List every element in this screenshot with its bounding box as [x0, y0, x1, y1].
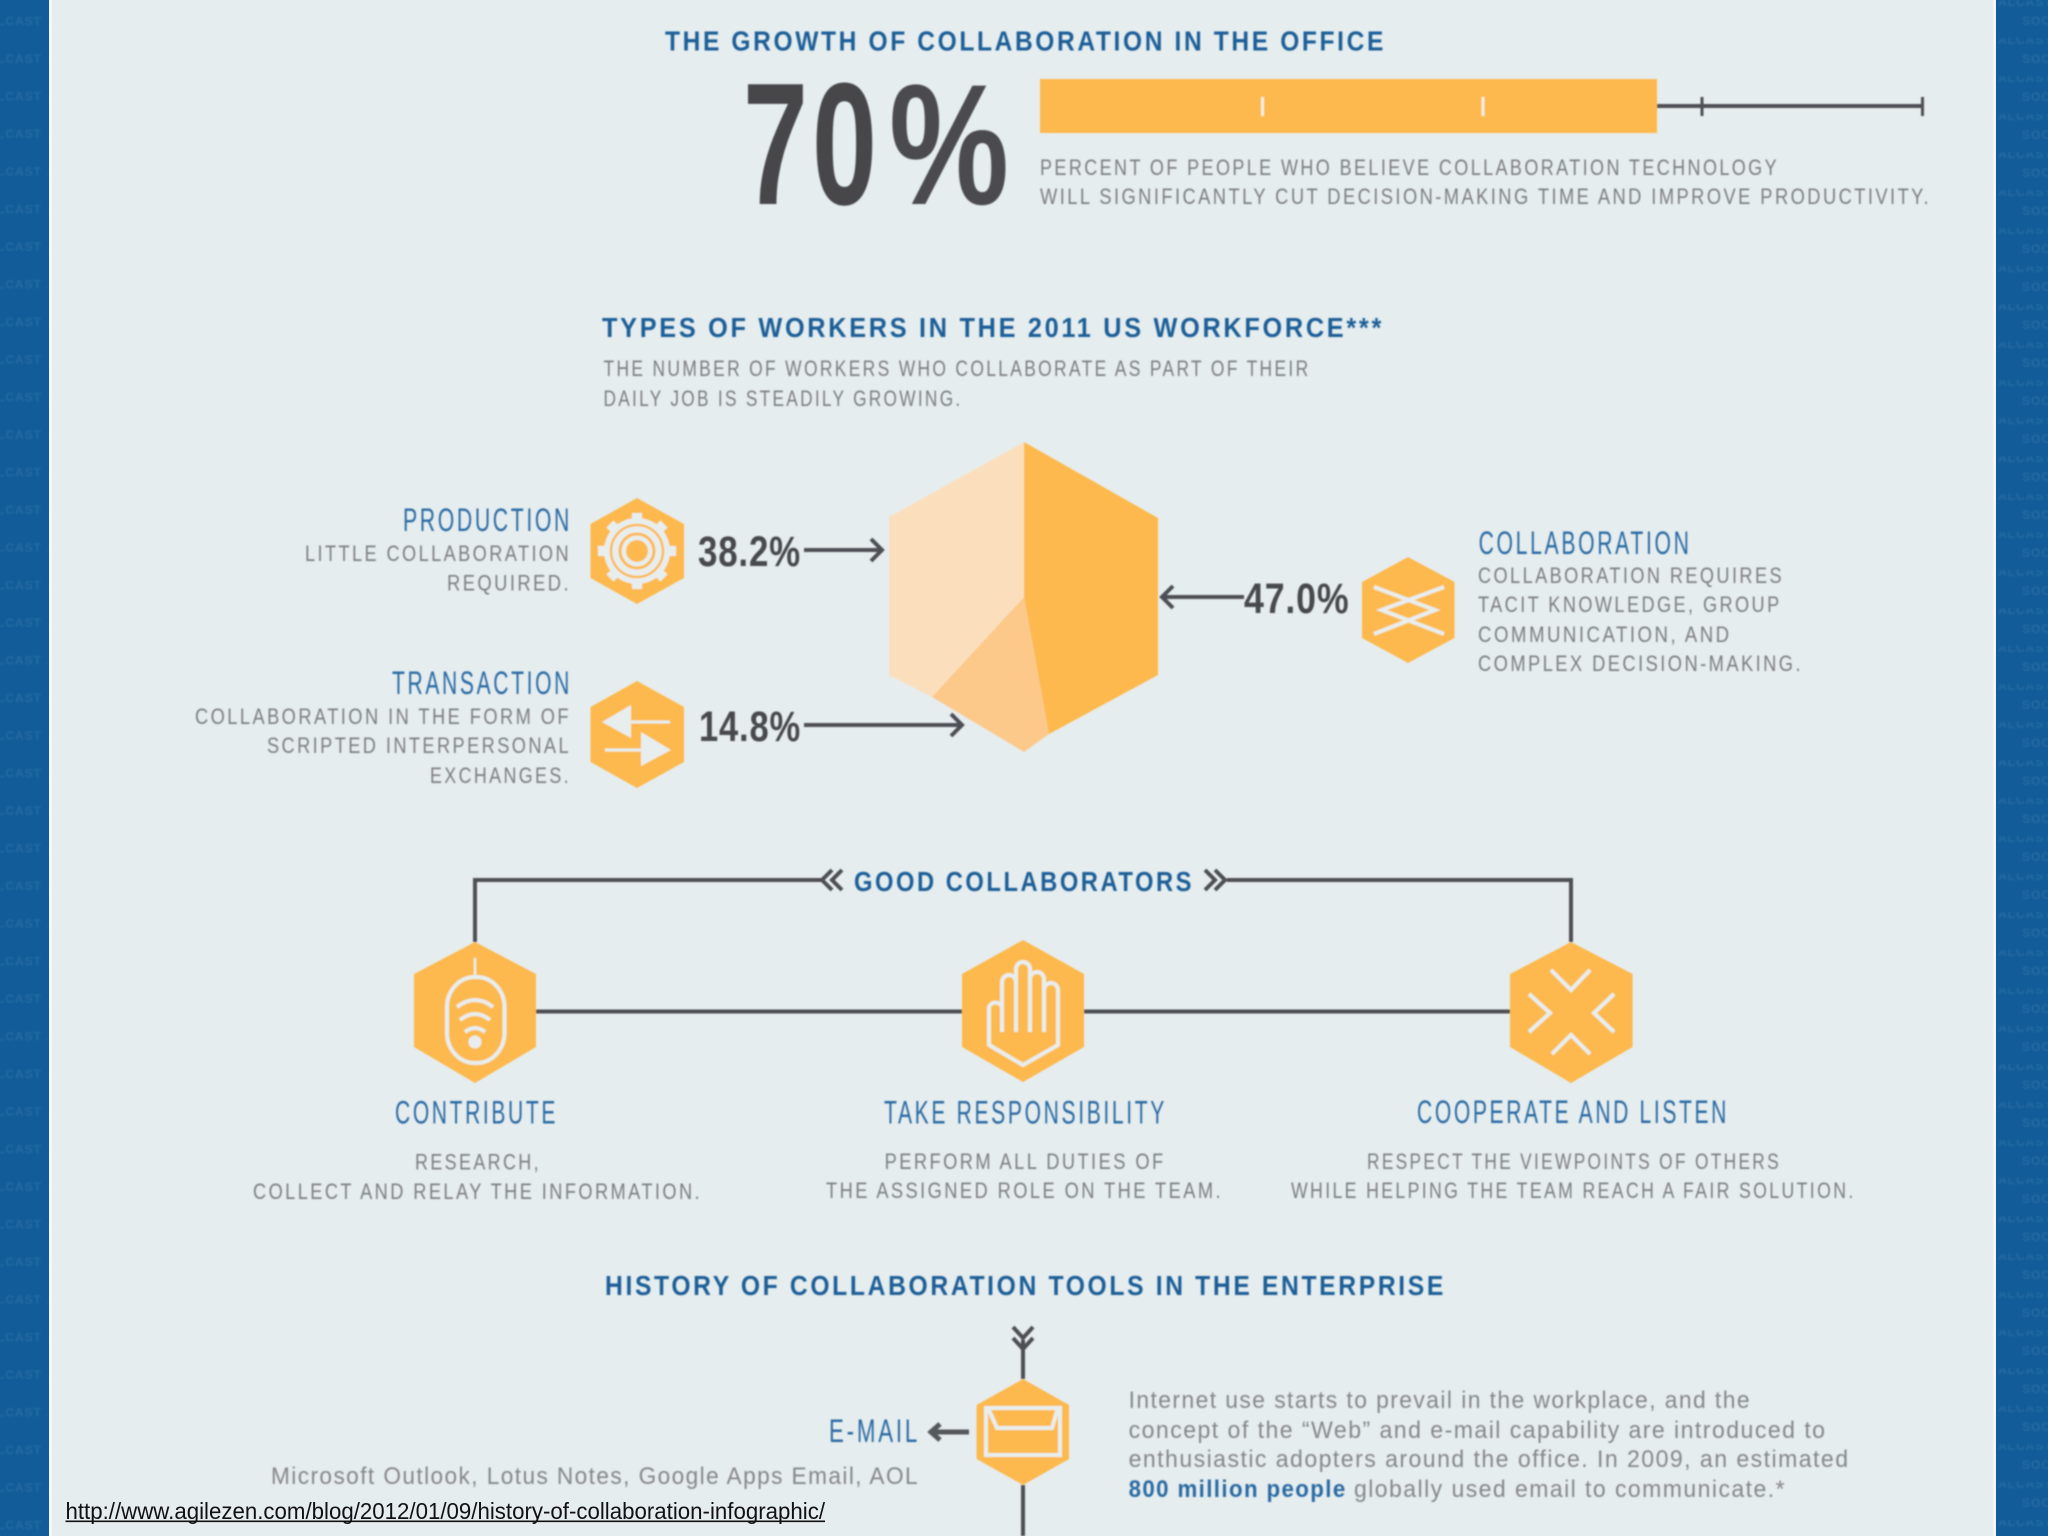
text: contribute: RESEARCH,: [415, 1150, 541, 1174]
big number: 70%: 70: [743, 46, 881, 241]
text: collaboration: TACIT KNOWLEDGE, GROUP: [1478, 592, 1782, 617]
bracket: good collaborators connector: [475, 880, 1571, 942]
progress bar: 70 percent: [1040, 79, 1924, 133]
text: production: PRODUCTION: [403, 502, 572, 538]
heading: history of collaboration tools: HISTORY OF COLLABORATION TOOLS IN THE ENTERPRISE: [605, 1270, 1446, 1301]
text: cooperate and listen: WHILE HELPING THE TEAM REACH A FAIR SOLUTION.: [1291, 1178, 1856, 1203]
text: e-mail history paragraph: globally used email to communicate.*: [1354, 1476, 1786, 1503]
left blue side band: [0, 0, 52, 1536]
icon: hand hexagon: [962, 940, 1084, 1082]
big number: 70%: %: [889, 49, 1009, 241]
arrow: e-mail: [931, 1424, 969, 1440]
icon: exchange arrows hexagon: [590, 681, 684, 788]
text: production: REQUIRED.: [447, 570, 571, 596]
connector: between hexagons: [536, 1010, 1510, 1014]
text: transaction: TRANSACTION: [392, 665, 572, 701]
chevrons: right: [1205, 870, 1225, 890]
heading: growth of collaboration: THE GROWTH OF COLLABORATION IN THE OFFICE: [665, 26, 1386, 56]
text: cooperate and listen: [1291, 1094, 1856, 1203]
text: transaction: COLLABORATION IN THE FORM OF: [195, 704, 571, 729]
text: take responsibility: THE ASSIGNED ROLE ON THE TEAM.: [826, 1178, 1223, 1203]
text: collaboration: COMPLEX DECISION-MAKING.: [1478, 651, 1803, 676]
text: e-mail products: Microsoft Outlook, Lotus Notes, Google Apps Email, AOL: [271, 1463, 919, 1490]
text: production: [305, 502, 572, 596]
text: workers intro: [604, 356, 1310, 411]
text: contribute: [253, 1094, 702, 1204]
text: workers intro: DAILY JOB IS STEADILY GROWING.: [604, 386, 962, 411]
heading: types of workers: TYPES OF WORKERS IN THE 2011 US WORKFORCE***: [602, 312, 1384, 343]
icon: converging chevrons hexagon: [1510, 942, 1633, 1083]
text: e-mail label: E-MAIL: [829, 1413, 920, 1449]
text: contribute: CONTRIBUTE: [395, 1094, 558, 1130]
text: transaction: EXCHANGES.: [430, 763, 571, 788]
value: 38.2%: 38.2%: [698, 528, 801, 576]
text: collaboration: COMMUNICATION, AND: [1478, 622, 1732, 647]
icon: gear hexagon: [590, 498, 684, 604]
source link: http://www.agilezen.com/blog/2012/01/09/history-of-collaboration-infographic/: [66, 1498, 826, 1524]
text: production: LITTLE COLLABORATION: [305, 541, 571, 566]
text: e-mail history paragraph: Internet use starts to prevail in the workplace, and the: [1129, 1387, 1751, 1414]
text: percent description: PERCENT OF PEOPLE WHO BELIEVE COLLABORATION TECHNOLOGY: [1040, 155, 1779, 180]
text: percent description: [1040, 155, 1931, 209]
arrow: collaboration to hexagon: [1162, 586, 1244, 608]
text: transaction: SCRIPTED INTERPERSONAL: [267, 733, 571, 758]
text: e-mail history paragraph: [1129, 1387, 1850, 1503]
icon: crossed lines hexagon: [1362, 557, 1454, 663]
text: transaction: [195, 665, 572, 788]
value: 47.0%: 47.0%: [1244, 575, 1350, 623]
text: workers intro: THE NUMBER OF WORKERS WHO COLLABORATE AS PART OF THEIR: [604, 356, 1310, 381]
text: e-mail history paragraph: concept of the “Web” and e-mail capability are introduced to: [1129, 1417, 1826, 1444]
timeline chevrons and line: [1013, 1327, 1033, 1536]
text: e-mail history paragraph: enthusiastic adopters around the office. In 2009, an estimated: [1129, 1446, 1850, 1473]
icon: envelope hexagon: [977, 1379, 1069, 1485]
text: e-mail history paragraph: 800 million people: [1129, 1476, 1347, 1503]
arrow: transaction to hexagon: [804, 714, 962, 736]
heading: good collaborators: GOOD COLLABORATORS: [854, 866, 1194, 897]
right blue side band: [1993, 0, 2048, 1536]
text: cooperate and listen: COOPERATE AND LISTEN: [1417, 1094, 1729, 1130]
value: 14.8%: 14.8%: [699, 703, 801, 751]
text: cooperate and listen: RESPECT THE VIEWPOINTS OF OTHERS: [1367, 1149, 1781, 1174]
text: take responsibility: PERFORM ALL DUTIES OF: [885, 1149, 1166, 1174]
text: collaboration: COLLABORATION REQUIRES: [1478, 563, 1784, 588]
text: take responsibility: [826, 1094, 1223, 1203]
text: take responsibility: TAKE RESPONSIBILITY: [884, 1094, 1167, 1130]
icon: mouse hexagon: [414, 942, 536, 1083]
text: collaboration: COLLABORATION: [1479, 525, 1692, 561]
text: contribute: COLLECT AND RELAY THE INFORMATION.: [253, 1179, 702, 1204]
chart: workforce hexagon: [889, 442, 1158, 752]
chevrons: left: [822, 870, 842, 890]
text: collaboration: [1478, 525, 1803, 676]
arrow: production to hexagon: [804, 539, 882, 561]
